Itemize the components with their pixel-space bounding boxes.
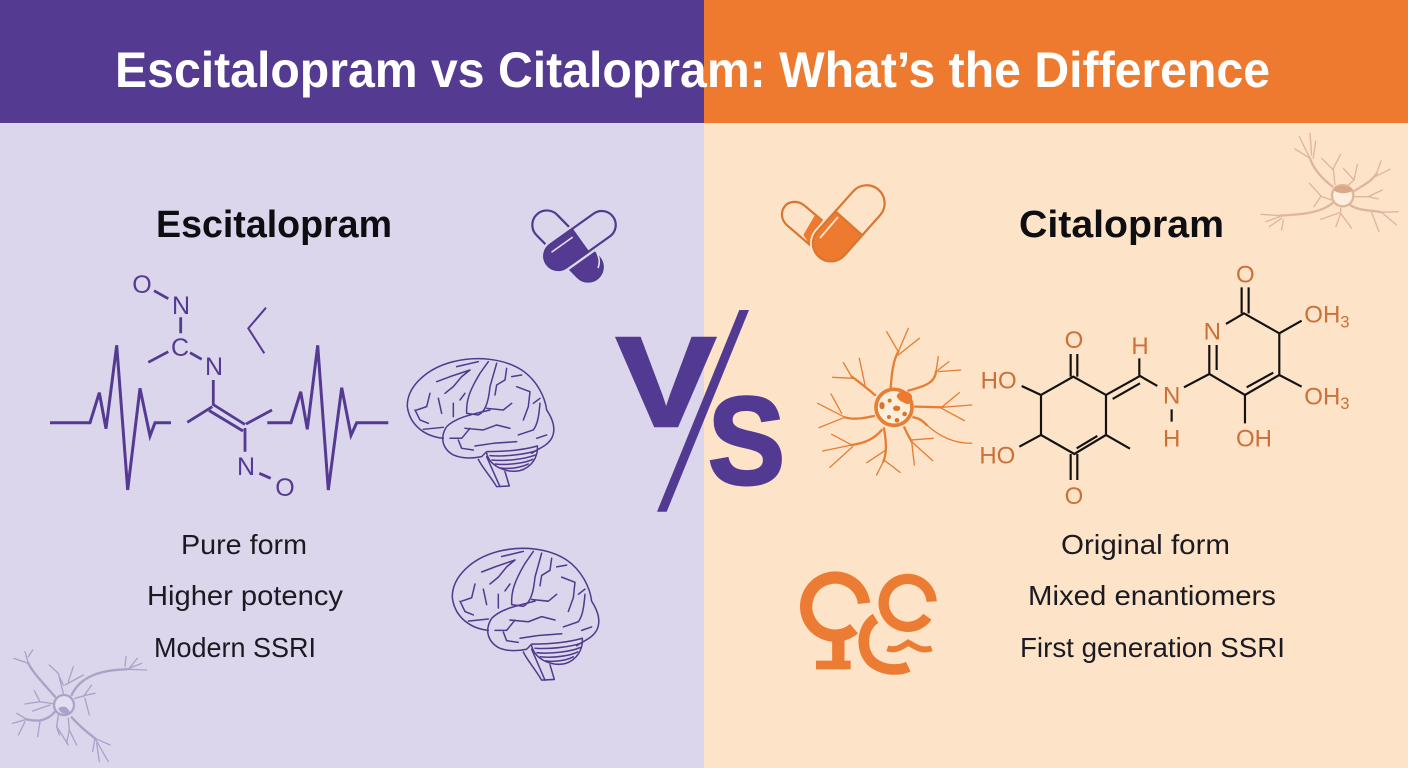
- molecule: escitalopram structure: O: [132, 271, 152, 299]
- molecule: citalopram structure: O: [1065, 483, 1083, 510]
- molecule: escitalopram structure: [132, 271, 295, 502]
- text block: escitalopram features: Pure form: [181, 529, 307, 560]
- icon: faint neuron bottom left: [13, 650, 147, 762]
- molecule: citalopram structure: H: [1163, 426, 1180, 453]
- icon: purple brain bottom: [452, 548, 599, 680]
- heading: Escitalopram: Escitalopram: [156, 204, 392, 246]
- vs badge: V: [616, 311, 716, 454]
- molecule: citalopram structure: HO: [981, 368, 1017, 395]
- molecule: citalopram structure: 3: [1340, 394, 1350, 413]
- text block: citalopram features: First generation SSRI: [1020, 632, 1285, 663]
- molecule: escitalopram structure: N: [205, 353, 223, 381]
- molecule: citalopram structure: OH: [1236, 426, 1272, 453]
- panel: citalopram background: [704, 123, 1408, 768]
- header band: [0, 0, 1408, 123]
- molecule: citalopram structure: N: [1163, 383, 1180, 410]
- text block: citalopram features: [1020, 529, 1285, 663]
- panel: escitalopram background: [0, 123, 704, 768]
- vs badge: S: [708, 373, 785, 511]
- text block: escitalopram features: Higher potency: [147, 580, 343, 611]
- molecule: citalopram structure: HO: [979, 443, 1015, 470]
- molecule: citalopram structure: O: [1236, 262, 1255, 289]
- text block: escitalopram features: Modern SSRI: [154, 632, 316, 663]
- molecule: citalopram structure: OH: [1304, 383, 1340, 410]
- icon: purple brain top: [407, 359, 554, 487]
- molecule: citalopram structure: N: [1204, 319, 1221, 346]
- text block: escitalopram features: [147, 529, 343, 663]
- molecule: escitalopram structure: N: [172, 292, 190, 320]
- molecule: escitalopram structure: O: [275, 474, 295, 502]
- molecule: citalopram structure: [979, 262, 1350, 510]
- icon: purple crossed capsules: [526, 204, 621, 288]
- molecule: citalopram structure: O: [1065, 327, 1083, 354]
- text block: citalopram features: Original form: [1061, 529, 1230, 560]
- chart: right ECG trace: [267, 345, 388, 490]
- molecule: citalopram structure: 3: [1340, 312, 1350, 331]
- molecule: citalopram structure: H: [1131, 333, 1149, 360]
- icon: faint neuron top right: [1261, 133, 1398, 232]
- icon: orange neuron: [818, 328, 972, 475]
- text block: citalopram features: Mixed enantiomers: [1028, 580, 1276, 611]
- icon: orange enantiomer symbol: [806, 578, 932, 669]
- heading: Citalopram: Citalopram: [1019, 204, 1224, 246]
- molecule: citalopram structure: OH: [1304, 302, 1340, 329]
- molecule: escitalopram structure: C: [171, 334, 189, 362]
- chart: left ECG trace: [50, 345, 171, 490]
- icon: orange capsules: [782, 178, 892, 269]
- vs badge: [616, 310, 785, 512]
- title: Escitalopram vs Citalopram: What’s the Difference: [115, 42, 1270, 98]
- molecule: escitalopram structure: N: [237, 453, 255, 481]
